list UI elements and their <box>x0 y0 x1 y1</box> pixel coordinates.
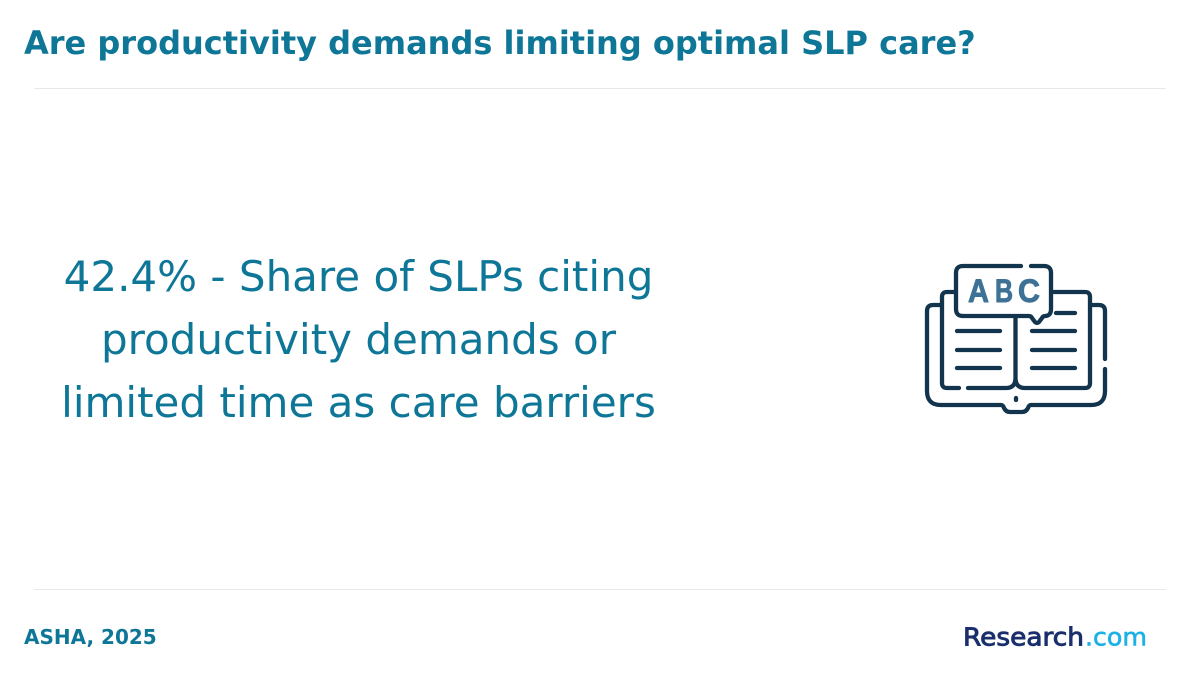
text lines <box>957 313 1075 368</box>
main statistic text <box>61 252 656 427</box>
title: Are productivity demands limiting optimal SLP care? <box>24 24 976 62</box>
logo: Research.com: Research <box>963 622 1084 652</box>
ABC letters: B <box>995 273 1013 309</box>
logo: Research.com: .com <box>1085 622 1147 652</box>
ABC letters <box>968 273 1040 309</box>
speech bubble <box>956 266 1051 323</box>
main statistic text: limited time as care barriers <box>61 378 656 427</box>
book outer cover <box>927 305 1105 412</box>
main statistic text: 42.4% - Share of SLPs citing <box>64 252 653 301</box>
ABC letters: C <box>1018 273 1040 309</box>
main statistic text: productivity demands or <box>101 315 616 364</box>
ABC letters: A <box>968 273 989 309</box>
logo: Research.com <box>963 622 1147 652</box>
source label: ASHA, 2025 <box>24 624 157 648</box>
icon: open book with ABC speech bubble <box>924 264 1108 414</box>
dot <box>1014 398 1018 400</box>
book pages <box>942 292 1090 388</box>
